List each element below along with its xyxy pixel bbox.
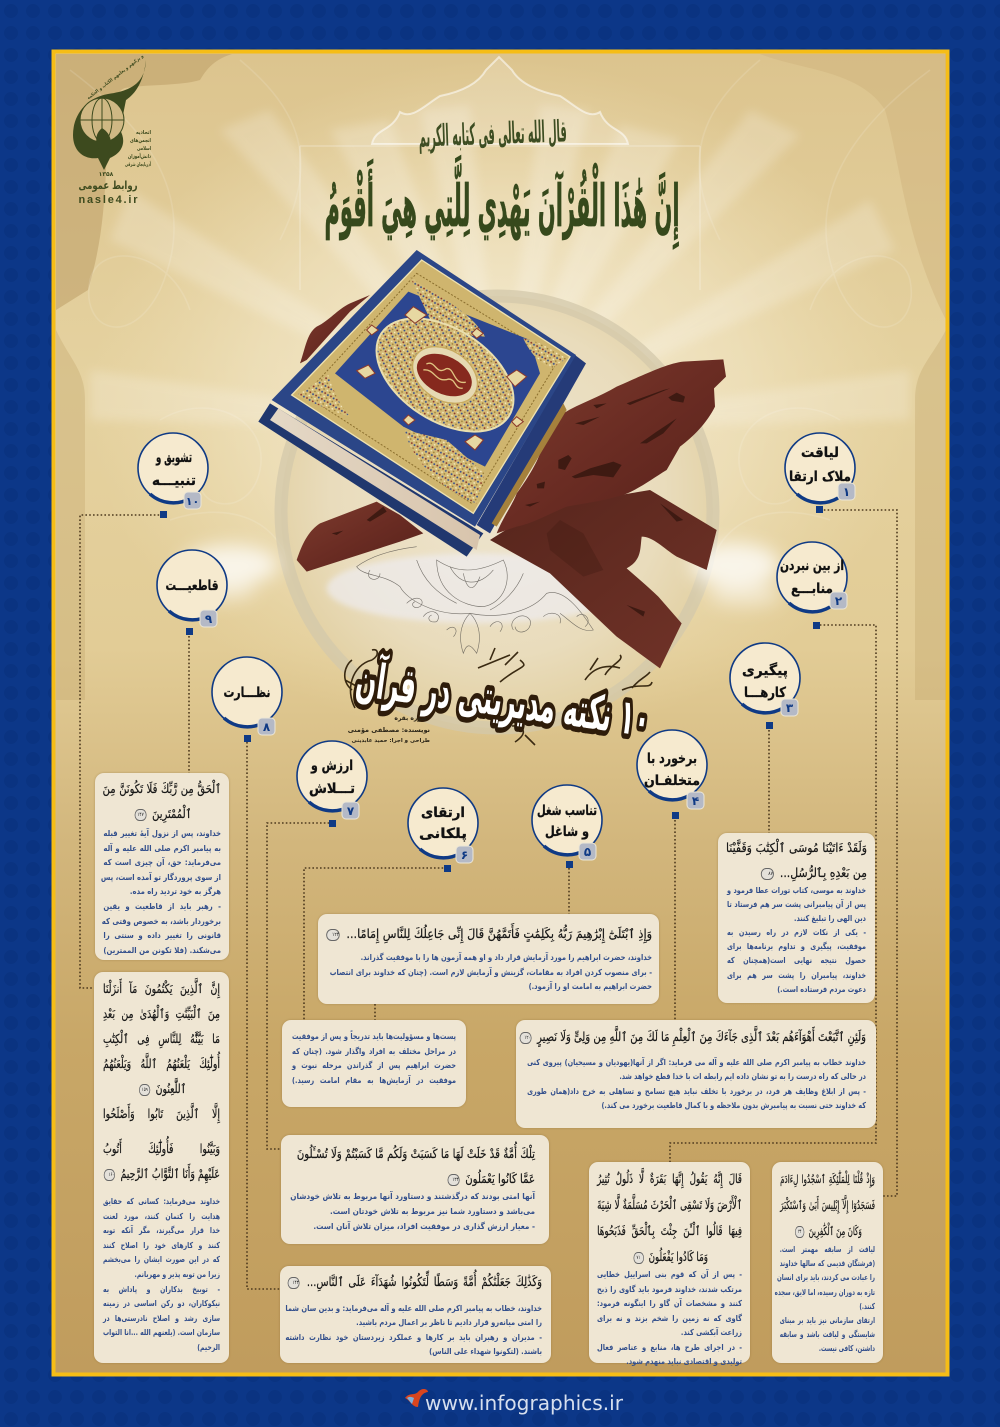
decorative arabesque lines	[70, 60, 930, 570]
connector lines	[80, 510, 897, 1289]
step 8 circle	[212, 657, 282, 727]
step 4 node	[672, 812, 679, 819]
explanation text	[292, 1030, 456, 1085]
step 6	[408, 788, 478, 872]
explanation text: کنند و کارهای خود را اصلاح کنند	[103, 1240, 220, 1250]
blue cover panel	[335, 292, 540, 467]
step 4 label	[644, 751, 700, 789]
step 4 badge	[687, 792, 704, 809]
dome ornament behind title	[300, 57, 700, 290]
red central medallion	[410, 345, 479, 405]
verse text	[596, 1168, 742, 1264]
panel: step 8 verse	[280, 1266, 551, 1363]
explanation text: دعوت مردم فرستاده است.)	[777, 984, 866, 994]
stand front board	[497, 359, 726, 533]
verse text: وَمَا كَادُوا يَفْعَلُونَ	[649, 1249, 708, 1264]
panel: step 4 verse	[516, 1020, 876, 1128]
soft shadow under the stand	[327, 553, 627, 623]
step 4 circle	[637, 730, 707, 800]
explanation text: - برای منصوب کردن افراد به مقامات، گزینش و آزمایش لازم است. (چنان که خداوند برای انتصاب	[330, 966, 652, 976]
verse text: ۱۲۰	[524, 1034, 531, 1040]
step 10: ۱۰	[186, 495, 199, 508]
explanation text: در حالی که راه درست را به تو نشان داده ایم رابطه ات با خدا قطع خواهد شد.	[619, 1071, 866, 1081]
step 10	[138, 433, 208, 518]
explanation text: گاوی که نه زمین را شخم بزند و نه برای	[597, 1312, 742, 1322]
step 3 label: کارهـــا	[744, 685, 787, 701]
verse text: فَسَجَدُوٓا إِلَّآ إِبْلِيسَ أَبَىٰ وَٱسْتَكْبَرَ	[780, 1198, 875, 1212]
step 5 circle	[532, 785, 602, 855]
book cover	[272, 250, 576, 527]
step 9: ۹	[205, 612, 213, 626]
step 4: ۴	[692, 794, 699, 808]
step 10 label	[152, 450, 196, 489]
step 2 circle	[777, 542, 847, 612]
top left darker tan corner	[56, 54, 232, 310]
logo organisation text: اسلامی	[137, 146, 151, 152]
stand rear leg	[490, 490, 717, 668]
step 8: ۸	[263, 720, 271, 734]
step 1 label: ملاک ارتقا	[789, 469, 851, 485]
explanation text: خداوند، پس از نزول آیهٔ تغییر قبله	[103, 828, 221, 838]
verse text: ۱۵۹	[142, 1086, 148, 1092]
explanation text: کنند.)	[859, 1301, 875, 1311]
step 2 node	[813, 622, 820, 629]
step 10 label: تنبیـــه	[152, 473, 196, 489]
calligraphy verse title: إِنَّ هَٰذَا الْقُرْآنَ يَهْدِي لِلَّتِي هِيَ أَقْوَمُ	[324, 153, 680, 250]
step 2	[777, 542, 847, 629]
explanation text: - معیار ارزش گذاری در موفقیت افراد، میزان تلاش آنان است.	[313, 1221, 535, 1231]
explanation text	[527, 1057, 866, 1110]
logo globe	[80, 98, 124, 142]
explanation text: حضرت ابراهیم به امامت او را آزمود.)	[529, 981, 652, 991]
explanation text: - رهبر باید از قاطعیت و یقین	[103, 901, 221, 911]
step 1 label	[789, 445, 851, 485]
verse text: ٱلْأَرْضَ وَلَا تَسْقِى ٱلْحَرْثَ مُسَلَّمَةٌ لَّا شِيَةَ	[597, 1197, 742, 1212]
explanation text: حضرت ابراهیم پس از گذراندن مرحله نبوت و	[292, 1060, 456, 1070]
step 9	[157, 550, 227, 635]
logo emblem	[73, 60, 146, 170]
logo organisation text: آذربایجان شرقی	[125, 160, 151, 168]
explanation text: خداوند خطاب به پیامبر اکرم صلی الله علیه و آله می فرماید: اگر از آنها(یهودیان و مسیحیان) پیروی کنی	[527, 1057, 866, 1067]
step 3 circle	[730, 643, 800, 713]
explanation text: می‌باشد و دستاورد شما نیز مربوط به تلاش خودتان است.	[330, 1206, 535, 1216]
gold arches	[410, 277, 485, 337]
verse text: مَا بَيَّنَّٰهُ لِلنَّاسِ فِى ٱلْكِتَٰبِ	[103, 1031, 220, 1046]
verse text	[726, 838, 867, 882]
step 7: ۷	[347, 804, 355, 818]
step 5 badge	[579, 843, 596, 860]
explanation text: قانونی را تغییر داده و سنتی را	[103, 930, 221, 940]
explanation text: پس از آن پیامبرانی پشت سر هم فرستاد تا	[727, 899, 866, 909]
verse text: وَكَذَٰلِكَ جَعَلْنَٰكُمْ أُمَّةً وَسَطًا لِّتَكُونُوا شُهَدَآءَ عَلَى ٱلنَّاسِ...	[307, 1274, 542, 1289]
verse text: عَمَّا كَانُوا يَعْمَلُونَ	[465, 1171, 535, 1186]
step 6 label	[419, 805, 467, 842]
explanation text: - مدیران و رهبران باید بر کارها و عملکرد زیردستان خود نظارت داشته	[285, 1332, 542, 1342]
panel: step 7 verse	[281, 1135, 549, 1244]
book pages	[270, 408, 480, 550]
explanation text: لیاقت از سابقه مهمتر است.	[780, 1244, 875, 1254]
step 7 label: تـــلاش	[309, 781, 355, 797]
verse text: إِنَّ ٱلَّذِينَ يَكْتُمُونَ مَآ أَنزَلْنَا	[103, 981, 220, 996]
step 2: ۲	[835, 594, 843, 608]
step 9 badge	[200, 610, 217, 627]
step 6: ۶	[461, 848, 468, 862]
step 4	[637, 730, 707, 819]
step 9 circle	[157, 550, 227, 620]
right column ornament	[760, 54, 946, 320]
step 2 label	[780, 558, 844, 597]
explanation text: باشند. (لتکونوا شهداء علی الناس)	[429, 1346, 542, 1356]
clouds	[182, 543, 781, 607]
step 5: ۵	[584, 845, 591, 859]
step 10 badge	[184, 492, 201, 509]
verse text: وَبَيَّنُوا فَأُولَٰٓئِكَ أَتُوبُ	[103, 1141, 220, 1156]
logo organisation text	[125, 130, 151, 168]
verse text	[103, 978, 220, 1184]
logo website: nasle4.ir	[78, 194, 138, 206]
step 6 node	[444, 865, 451, 872]
logo year: ۱۳۵۸	[99, 171, 114, 178]
logo organisation text: انجمن‌های	[130, 138, 151, 144]
explanation text	[285, 1303, 542, 1356]
panel: step 1 verse	[772, 1162, 883, 1363]
explanation text: موفقیت در آزمایش‌ها به مقام امامت رسید.)	[292, 1074, 456, 1084]
explanation text: خداوند، خطاب به پیامبر اکرم صلی الله علیه و آله می‌فرماید: و بدین سان شما	[285, 1303, 542, 1313]
verse text: وَكَانَ مِنَ ٱلْكَٰفِرِينَ	[809, 1224, 862, 1238]
step 7 node	[329, 820, 336, 827]
gold central rosette	[356, 295, 534, 455]
explanation text: خدا قرار می‌گیرند، مگر آنکه توبه	[103, 1225, 220, 1235]
step 9 node	[186, 628, 193, 635]
step 8 node	[244, 735, 251, 742]
explanation text	[102, 1196, 220, 1352]
explanation text: - پس از آن که قوم بنی اسراییل خطایی	[597, 1269, 742, 1279]
verse text: فِيهَا قَالُوا ٱلْـَٰٔنَ جِئْتَ بِٱلْحَقِّ فَذَبَحُوهَا	[597, 1223, 742, 1238]
step 3 label: پیگیری	[742, 662, 788, 679]
explanation text	[101, 828, 221, 955]
explanation text	[330, 952, 652, 991]
stand back top behind book	[300, 295, 370, 363]
verse text: قَالَ إِنَّهُ يَقُولُ إِنَّهَا بَقَرَةٌ لَّا ذَلُولٌ تُثِيرُ	[597, 1171, 742, 1186]
verse text	[288, 1269, 542, 1292]
verse text: ۱۴۳	[292, 1280, 299, 1286]
logo	[73, 53, 151, 206]
explanation text	[774, 1244, 875, 1353]
verse text: ٱللَّٰعِنُونَ	[156, 1081, 186, 1096]
explanation text: از سوی پروردگار تو آمده است، پس	[101, 872, 221, 882]
verse text: ۱۴۷	[137, 812, 144, 818]
panel: step 9 verse	[95, 773, 229, 960]
explanation text: زراعت آبکشی کند.	[681, 1327, 742, 1337]
step 5	[532, 785, 602, 868]
rosette tips	[357, 307, 527, 450]
step 8 badge	[258, 718, 275, 735]
explanation text: را امتی میانه‌رو قرار دادیم تا ناظر بر اعمال مردم باشید.	[356, 1317, 542, 1327]
step 6 badge	[456, 846, 473, 863]
step 3 node	[766, 722, 773, 729]
panel: step 6 explanation	[282, 1020, 466, 1107]
explanation text: سازمان است. (یلعنهم الله ...انا التواب	[103, 1327, 220, 1337]
step 1	[785, 433, 855, 513]
panel: step 10 verse	[94, 972, 229, 1363]
author credits	[348, 715, 430, 744]
verse text: ۱۲۴	[332, 932, 339, 938]
gold border frame	[292, 260, 570, 513]
verse text: وَإِذْ قُلْنَا لِلْمَلَٰٓئِكَةِ ٱسْجُدُوا لِءَادَمَ	[780, 1172, 875, 1186]
verse text: مِنَ ٱلْبَيِّنَٰتِ وَٱلْهُدَىٰ مِن بَعْدِ	[103, 1006, 220, 1021]
step 6 circle	[408, 788, 478, 858]
explanation text: داشتن، کافی نیست.	[819, 1343, 875, 1353]
logo arc text: و یزکیهم و یعلمهم الکتاب و الحکمه	[86, 53, 145, 101]
step 4 label: برخورد با	[647, 751, 697, 767]
step 4 label: متخلفـان	[644, 773, 700, 789]
panel: step 5 verse	[318, 914, 659, 1004]
explanation text: هرگز به خود تردید راه مده.	[130, 886, 221, 896]
step 1 node	[816, 506, 823, 513]
book lower board	[258, 403, 483, 557]
logo department: روابط عمومی	[78, 179, 138, 192]
heading text: ۱۰ نکته مدیریتی در قرآن	[353, 650, 654, 748]
explanation text: را عبادت می کردند، باید برای انسان	[777, 1272, 875, 1282]
book spine edge	[477, 355, 586, 533]
carved slots	[332, 388, 685, 617]
author credits: سوره بقره	[394, 715, 427, 722]
explanation text: کنند و مشخصات آن گاو را اینگونه فرمود:	[597, 1298, 742, 1308]
explanation text: سازی رشد و اصلاح نادرستی‌ها در	[103, 1313, 220, 1323]
explanation text: که خداوند حتی نسبت به پیامبرش بدون ملاحظه و با کمال قاطعیت برخورد می کند.)	[601, 1100, 866, 1110]
explanation text: - توبیخ بدکاران و پاداش به	[103, 1284, 220, 1294]
footer logo swoosh	[405, 1389, 428, 1407]
step 10 label: تشویق و	[155, 450, 192, 466]
verse text	[520, 1026, 866, 1048]
verse text: ۱۳۴	[452, 1176, 459, 1182]
side pillars	[56, 330, 946, 700]
explanation text: ارتقای سازمانی نیز باید بر مبنای	[780, 1315, 875, 1325]
floral line drawing	[357, 547, 593, 653]
verse text: وَإِذِ ٱبْتَلَىٰٓ إِبْرَٰهِيمَ رَبُّهُ بِكَلِمَٰتٍ فَأَتَمَّهُنَّ قَالَ إِنِّى جَاعِلُكَ لِلنَّاسِ إِمَامًا...	[346, 926, 652, 941]
verse text	[103, 780, 221, 823]
verse text: ٱلْمُمْتَرِينَ	[152, 806, 191, 821]
explanation text: تولیدی و اقتصادی نباید منهدم شود.	[626, 1356, 742, 1366]
explanation text: - پس از ابلاغ وظایف هر فرد، در برخورد با تخلف نباید هیچ تسامح و تساهلی به خرج داد(همان طوری	[527, 1086, 866, 1096]
explanation text: نیکوکاران، دو رکن اساسی در زمینه	[103, 1298, 220, 1308]
step 10 node	[160, 511, 167, 518]
step 1: ۱	[843, 485, 850, 499]
explanation text: می‌شکند. (فلا تکونن من الممترین)	[103, 945, 221, 955]
step 5 node	[566, 861, 573, 868]
step 8	[212, 657, 282, 742]
gold corners	[523, 338, 567, 368]
explanation text: در مراحل مختلف به افراد واگذار شود. (چنان که	[292, 1046, 456, 1056]
step 10 circle	[138, 433, 208, 503]
explanation text	[290, 1191, 536, 1231]
explanation text: حصول نتیجه نهایی است(همچنان که	[727, 955, 866, 965]
step 2 label: از بین نبردن	[780, 558, 844, 574]
step 1 label: لیاقت	[801, 445, 839, 461]
explanation text: - یکی از نکات لازم در راه رسیدن به	[727, 927, 866, 937]
step 7 circle	[297, 741, 367, 811]
heading floral swirls	[345, 648, 652, 745]
panel: step 2 verse	[589, 1162, 750, 1363]
step 8 label: نظـــارت	[224, 685, 270, 701]
stand front left leg	[297, 502, 423, 572]
gilded page edge	[492, 403, 567, 527]
step 7 label: ارزش و	[310, 758, 353, 774]
verse text: أُولَٰٓئِكَ يَلْعَنُهُمُ ٱللَّهُ وَيَلْعَنُهُمُ	[103, 1056, 220, 1071]
verse text: إِلَّا ٱلَّذِينَ تَابُوا وَأَصْلَحُوا	[103, 1106, 220, 1121]
explanation text: آنها امتی بودند که درگذشتند و دستاورد آنها مربوط به تلاش خودشان	[290, 1191, 535, 1201]
large disc behind book	[281, 296, 713, 728]
logo organisation text: دانش‌آموزان	[128, 152, 151, 160]
step 3	[730, 643, 800, 729]
verse text: ۷۱	[637, 1254, 640, 1260]
explanation text: برخوردار باشد، به خصوص وقتی که	[102, 916, 221, 926]
step 6 label: ارتقای	[421, 805, 465, 821]
poster background and artwork: قال الله تعالی فی کتابه الکریم	[418, 114, 567, 155]
step 5 label	[537, 803, 597, 840]
step 5 label: و شاغل	[545, 824, 589, 840]
explanation text: به پیامبر اکرم صلی الله علیه و آله	[103, 843, 221, 853]
footer website: www.infographics.ir	[425, 1391, 624, 1415]
step 2 badge	[830, 592, 847, 609]
explanation text: خداوند به موسی، کتاب تورات عطا فرمود و	[727, 885, 866, 895]
explanation text: مرتکب شدند، خداوند فرمود باید گاوی را ذبح	[597, 1284, 742, 1294]
explanation text	[726, 885, 866, 994]
step 3: ۳	[786, 701, 794, 715]
step 5 label: تناسب شغل	[537, 803, 597, 819]
verse text: وَلَئِنِ ٱتَّبَعْتَ أَهْوَآءَهُم بَعْدَ ٱلَّذِى جَآءَكَ مِنَ ٱلْعِلْمِ مَا لَكَ مِنَ ٱللَّهِ مِن وَلِىٍّ وَلَا نَصِيرٍ	[537, 1029, 866, 1044]
explanation text: خداوند، پیامبران را پشت سر هم برای	[727, 970, 866, 980]
verse text	[780, 1170, 875, 1240]
author credits: طراحی و اجرا: حمید عابدینی	[352, 738, 430, 744]
explanation text	[597, 1269, 742, 1366]
verse text: ۳۴	[798, 1228, 801, 1234]
step 3 badge	[781, 699, 798, 716]
explanation text: - در اجرای طرح ها، منابع و عناصر فعال	[597, 1342, 742, 1352]
step 9 label: قاطعیـــت	[166, 578, 218, 594]
step 3 label	[742, 662, 788, 701]
verse text: ٱلْحَقُّ مِن رَّبِّكَ فَلَا تَكُونَنَّ مِنَ	[103, 781, 221, 796]
verse text: عَلَيْهِمْ وَأَنَا ٱلتَّوَّابُ ٱلرَّحِيمُ	[121, 1166, 220, 1181]
explanation text: هدایت را کتمان کنند، مورد لعنت	[103, 1211, 220, 1221]
light rays	[90, 105, 910, 430]
verse text: ۱۶۰	[109, 1172, 115, 1178]
step 1 circle	[785, 433, 855, 503]
main heading	[345, 648, 654, 748]
step 1 badge	[838, 483, 855, 500]
explanation text: خداوند می‌فرماید: کسانی که حقایق	[103, 1196, 220, 1206]
step 7 badge	[342, 802, 359, 819]
logo organisation text: اتحادیه	[136, 130, 151, 136]
author credits: نویسنده: مصطفی مؤمنی	[348, 726, 430, 734]
verse text	[326, 923, 652, 944]
verse text: وَلَقَدْ ءَاتَيْنَا مُوسَى ٱلْكِتَٰبَ وَقَفَّيْنَا	[726, 840, 867, 855]
verse text: مِن بَعْدِهِ بِٱلرُّسُلِ...	[780, 865, 867, 880]
explanation text: شایستگی و لیاقت باشد و سابقه	[780, 1329, 875, 1339]
book on wooden stand	[258, 250, 726, 668]
verse text: ۸۷	[768, 870, 773, 876]
step 2 label: منابـــع	[791, 581, 833, 597]
step 7 label	[309, 758, 355, 797]
explanation text: تازه به دوران رسیده، اما لایق، سجده	[775, 1287, 875, 1297]
explanation text: (فرشتگان قدیمی که سالها خداوند	[780, 1258, 875, 1268]
central glow	[90, 60, 910, 740]
explanation text: خداوند، حضرت ابراهیم را مورد آزمایش قرار داد و او همه آزمون ها را با موفقیت گذراند.	[361, 952, 652, 962]
explanation text: موفقیت، پیگیری و تداوم برنامه‌ها برای	[727, 941, 866, 951]
step 7	[297, 741, 367, 827]
verse text	[297, 1141, 536, 1186]
logo tulip	[96, 128, 111, 156]
verse text: تِلْكَ أُمَّةٌ قَدْ خَلَتْ لَهَا مَا كَسَبَتْ وَلَكُم مَّا كَسَبْتُمْ وَلَا تُسْـَٔلُونَ	[297, 1146, 535, 1161]
explanation text: دین الهی را تبلیغ کنند.	[794, 913, 866, 923]
explanation text: الرحیم)	[197, 1342, 220, 1352]
explanation text: زیرا من توبه پذیر و مهربانم.	[134, 1269, 220, 1279]
step 6 label: پلکانی	[419, 826, 467, 842]
panel: step 3 verse	[718, 833, 875, 1003]
explanation text: پست‌ها و مسؤولیت‌ها باید تدریجاً و پس از موفقیت	[292, 1031, 456, 1041]
explanation text: که در این صورت ایشان را می‌بخشم	[103, 1254, 220, 1264]
explanation text: می‌فرماید: حق، آن چیزی است که	[103, 857, 221, 867]
